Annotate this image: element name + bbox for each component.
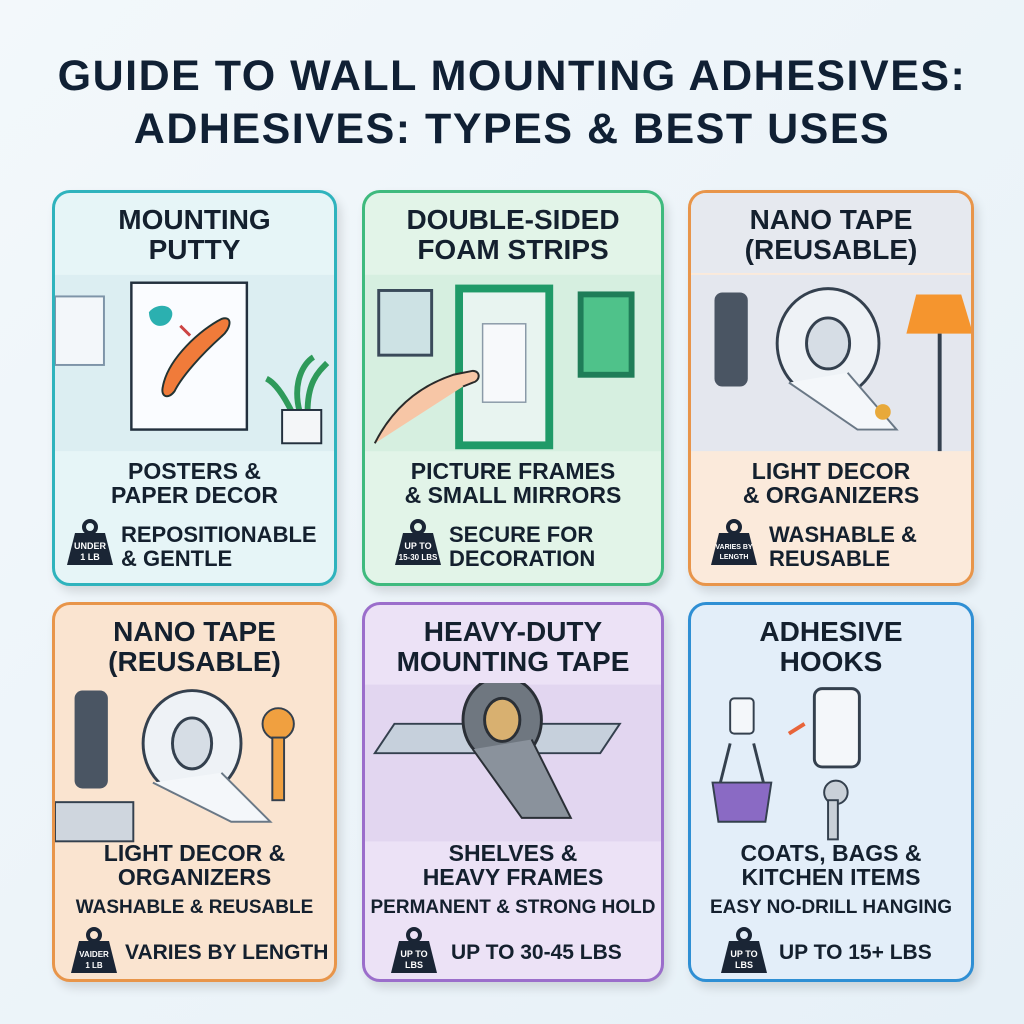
best use: ORGANIZERS — [118, 864, 271, 890]
badge: under 1 lb: UNDER — [74, 541, 106, 551]
panel: heavy-duty tape — [362, 602, 664, 982]
badge: varies by length — [711, 519, 757, 565]
heading: HEAVY-DUTY — [424, 616, 602, 647]
badge: varies by length: VARIES BY — [715, 544, 753, 551]
heading: MOUNTING TAPE — [397, 646, 629, 677]
weight text: UP TO 15+ LBS — [779, 941, 932, 964]
best use: PICTURE FRAMES — [411, 458, 615, 484]
property — [449, 522, 595, 571]
badge: UP TO — [400, 949, 428, 959]
best use: HEAVY FRAMES — [423, 864, 603, 890]
heading: DOUBLE-SIDED — [406, 204, 620, 235]
property: REPOSITIONABLE — [121, 522, 317, 547]
heading: (REUSABLE) — [108, 646, 281, 677]
heading — [108, 616, 281, 677]
badge: under 1 lb — [67, 519, 113, 565]
badge: up to 15-30 lbs: 15-30 LBS — [399, 553, 438, 562]
property — [121, 522, 317, 571]
illustration: tape roll, remote, lamp — [691, 275, 971, 452]
best use: KITCHEN ITEMS — [742, 864, 920, 890]
property: WASHABLE & REUSABLE — [76, 897, 313, 918]
weight text: UP TO 30-45 LBS — [451, 941, 622, 964]
panel: adhesive hooks — [688, 602, 974, 982]
heading: NANO TAPE — [113, 616, 276, 647]
badge: up to 15-30 lbs — [395, 519, 441, 565]
heading — [691, 193, 971, 273]
best use: PAPER DECOR — [111, 482, 278, 508]
heading — [406, 204, 620, 265]
badge: LBS — [735, 960, 753, 970]
best use — [423, 840, 603, 890]
heading: NANO TAPE — [750, 204, 912, 235]
best use: LIGHT DECOR & — [104, 840, 285, 866]
badge: LBS — [405, 960, 423, 970]
property: PERMANENT & STRONG HOLD — [370, 897, 656, 918]
badge — [721, 927, 767, 973]
title — [58, 52, 966, 153]
badge: UP TO — [730, 949, 758, 959]
title: ADHESIVES: TYPES & BEST USES — [134, 105, 890, 153]
property: & GENTLE — [121, 546, 232, 571]
heading: FOAM STRIPS — [417, 234, 609, 265]
best use — [104, 840, 285, 890]
best use — [743, 458, 919, 508]
heading: ADHESIVE — [759, 616, 903, 647]
badge — [71, 927, 117, 973]
property: REUSABLE — [769, 546, 890, 571]
panel: nano tape bottom — [52, 602, 337, 982]
badge — [391, 927, 437, 973]
best use: & SMALL MIRRORS — [405, 482, 621, 508]
badge: varies by length: LENGTH — [720, 554, 748, 561]
best use — [111, 458, 278, 508]
heading — [759, 616, 903, 677]
best use: & ORGANIZERS — [743, 482, 919, 508]
title: GUIDE TO WALL MOUNTING ADHESIVES: — [58, 52, 966, 100]
illustration: hooks with bag and keys — [711, 687, 861, 840]
heading: MOUNTING — [118, 204, 271, 235]
best use — [405, 458, 621, 508]
illustration: poster with putty — [55, 275, 334, 451]
badge: 1 LB — [85, 961, 103, 970]
property: WASHABLE & — [769, 522, 917, 547]
best use: COATS, BAGS & — [740, 840, 922, 866]
illustration: tape roll, remote, key — [55, 689, 295, 842]
best use: LIGHT DECOR — [752, 458, 910, 484]
badge: VAIDER — [79, 950, 109, 959]
panel: foam strips — [362, 190, 664, 586]
heading: PUTTY — [149, 234, 240, 265]
heading: (REUSABLE) — [745, 234, 917, 265]
panel: mounting putty — [52, 190, 337, 586]
property: EASY NO-DRILL HANGING — [710, 897, 952, 918]
panel: nano tape top — [688, 190, 974, 586]
illustration: frames and hand — [365, 275, 661, 451]
badge: up to 15-30 lbs: UP TO — [404, 541, 432, 551]
best use: SHELVES & — [449, 840, 577, 866]
heading — [118, 204, 271, 265]
property: DECORATION — [449, 546, 595, 571]
property — [769, 522, 917, 571]
heading: HOOKS — [780, 646, 882, 677]
illustration: shelf and tape — [365, 683, 661, 842]
best use: POSTERS & — [128, 458, 261, 484]
property: SECURE FOR — [449, 522, 593, 547]
weight text: VARIES BY LENGTH — [125, 941, 328, 964]
heading — [397, 616, 629, 677]
best use — [740, 840, 922, 890]
badge: under 1 lb: 1 LB — [80, 552, 100, 562]
